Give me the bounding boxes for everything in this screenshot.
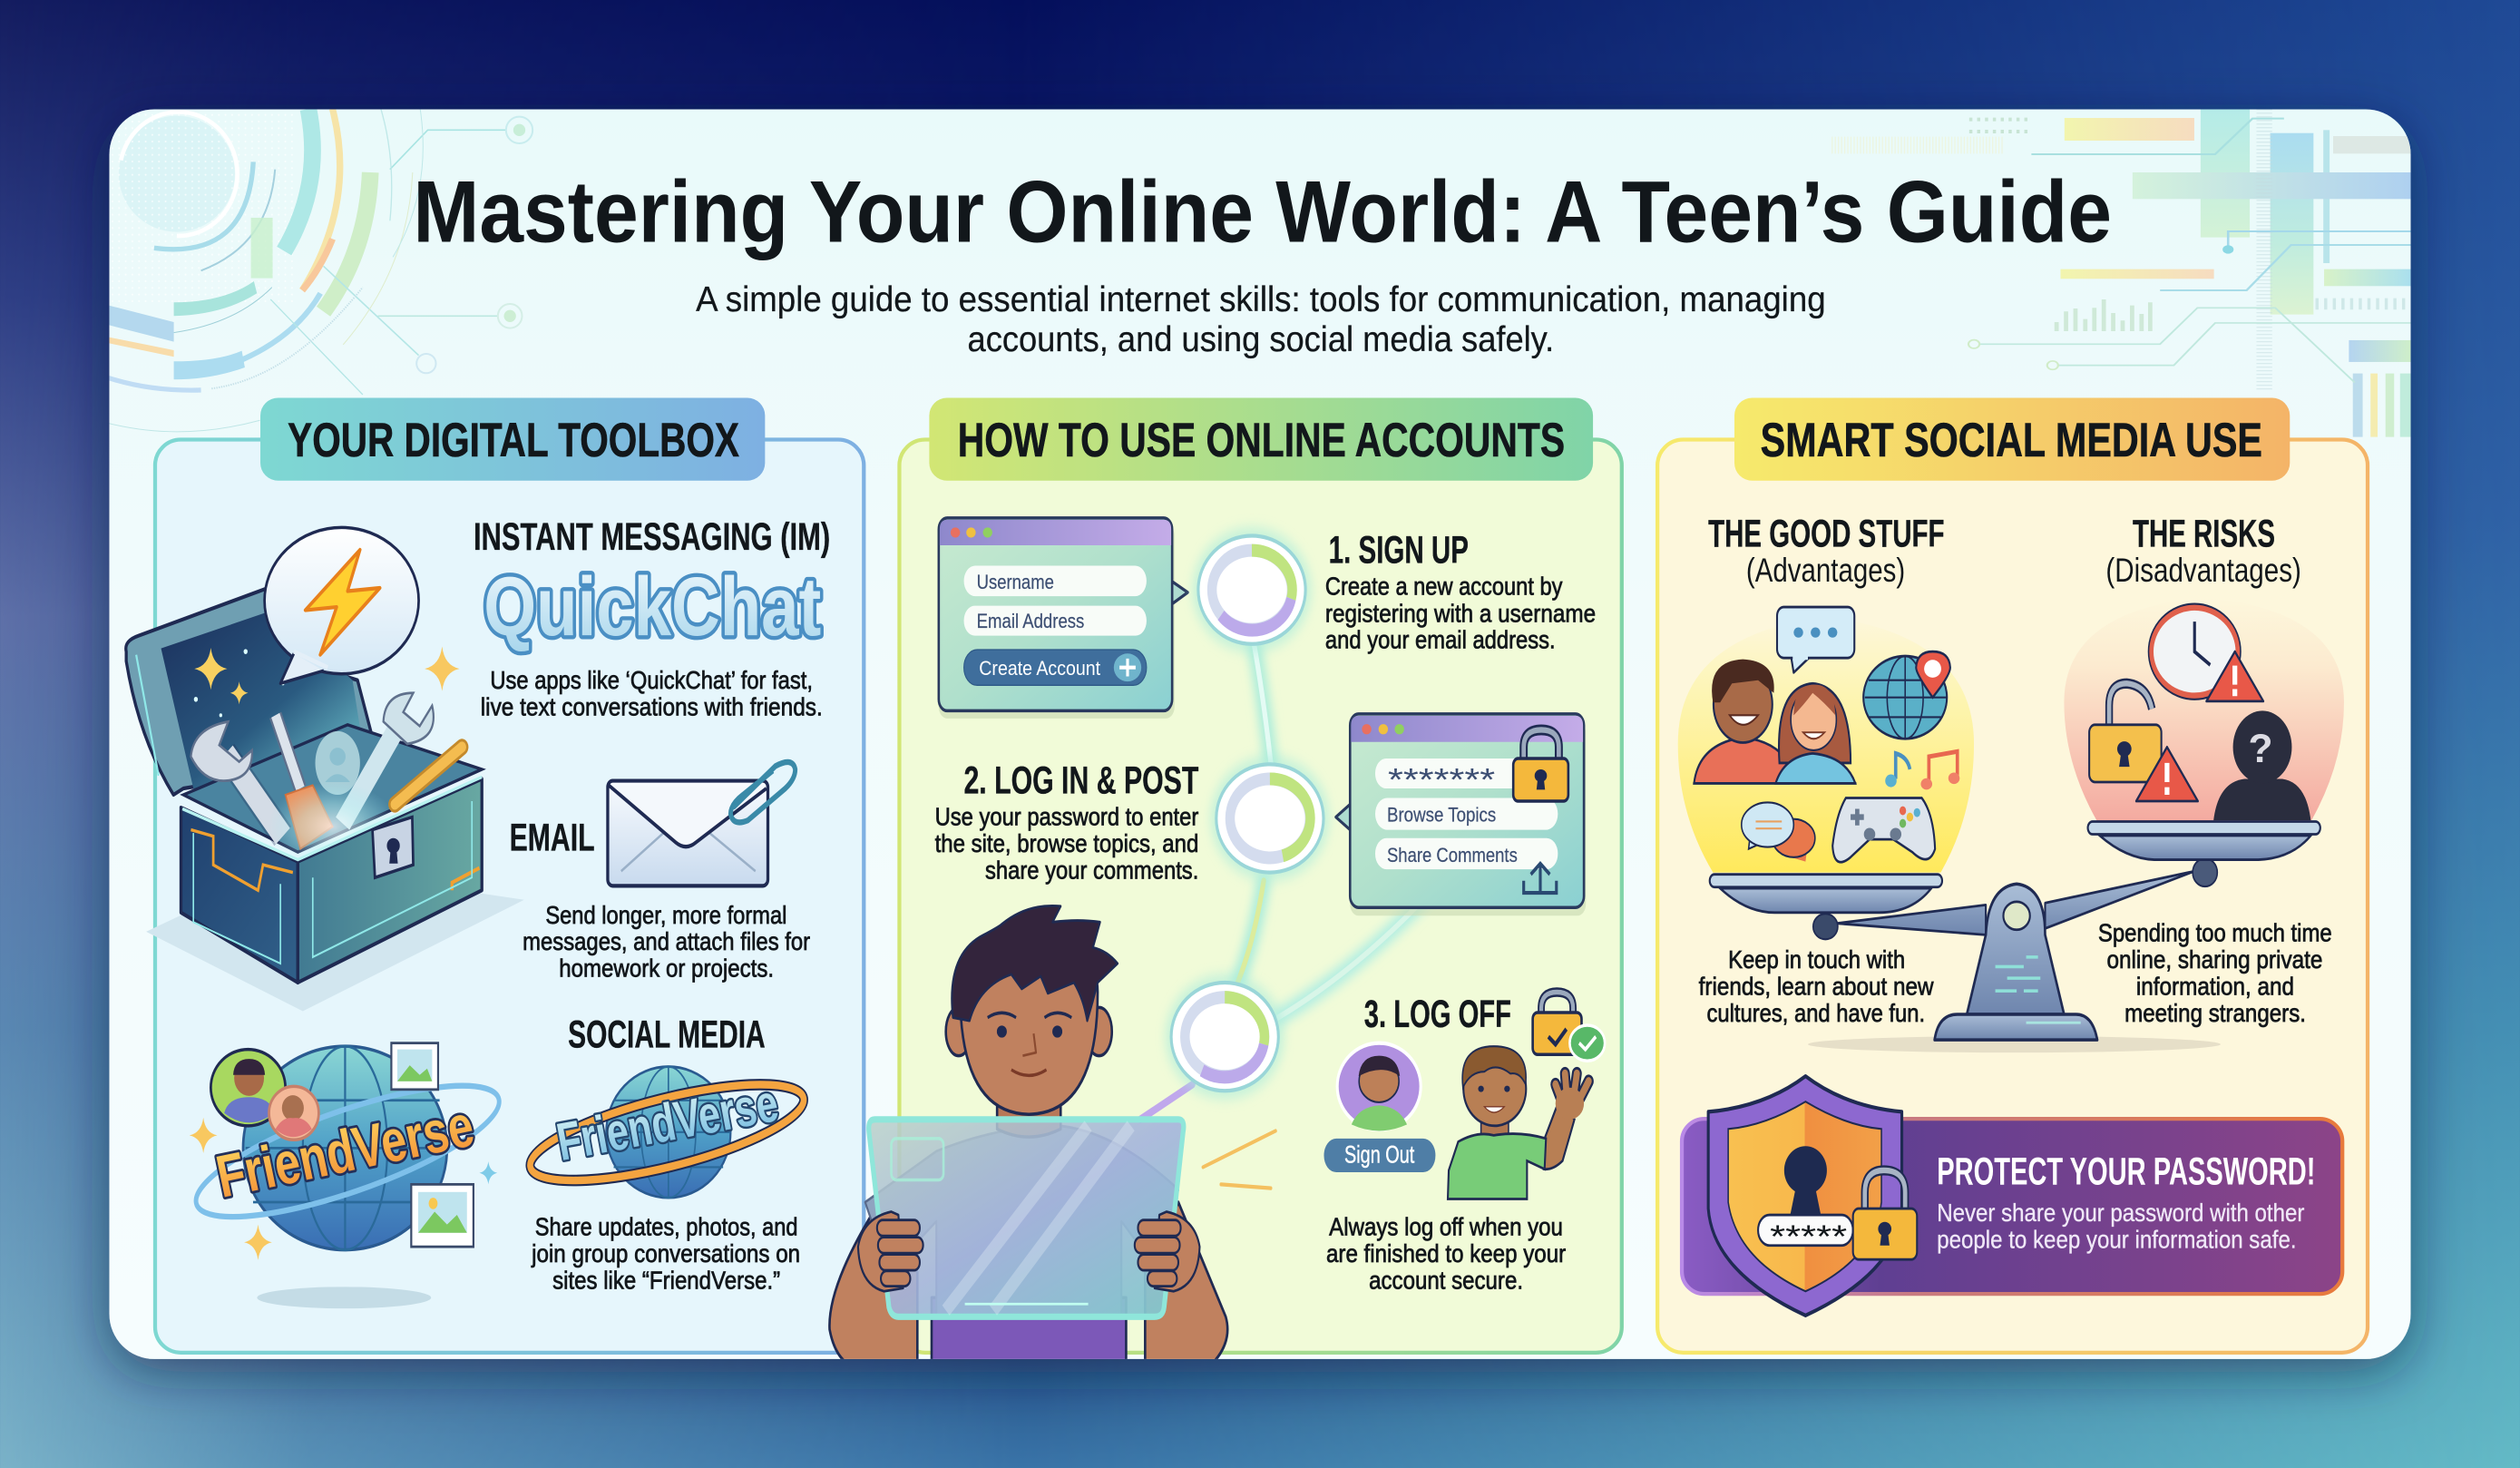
torso xyxy=(932,1297,1126,1365)
step 1 text: and your email address. xyxy=(1325,626,1556,654)
disadvantages text: online, sharing private xyxy=(2106,945,2322,974)
step 1 text xyxy=(1325,530,1596,654)
illustration: teen holding glass tablet xyxy=(829,905,1227,1365)
column heading: the good stuff xyxy=(1708,513,1945,589)
illustration: FriendVerse globe with profiles and photos xyxy=(188,1043,507,1308)
subtitle: accounts, and using social media safely. xyxy=(968,320,1554,359)
glowing connector path xyxy=(1140,645,1444,1120)
block: email: messages, and attach files for xyxy=(523,927,810,955)
column heading: the risks: THE RISKS xyxy=(2133,513,2275,555)
block: social media xyxy=(525,1014,809,1295)
advantages text xyxy=(1699,945,1934,1027)
card decoration: circuit patterns xyxy=(109,109,2415,437)
tablet xyxy=(869,1120,1184,1316)
heading tab: your digital toolbox xyxy=(260,397,765,481)
disadvantages text: information, and xyxy=(2136,972,2294,1000)
logo: FriendVerse globe with orange ring: FriendVerse xyxy=(552,1073,783,1172)
callout: protect your password: ***** xyxy=(1770,1218,1847,1255)
neck xyxy=(997,1088,1060,1137)
step 2 text: 2. LOG IN & POST xyxy=(963,760,1198,803)
main card xyxy=(109,109,2411,1359)
advantages text: Keep in touch with xyxy=(1728,945,1905,974)
motion rays near tablet xyxy=(1203,1130,1275,1189)
column heading: the risks xyxy=(2105,513,2301,589)
ears xyxy=(946,1007,1112,1056)
step 3 text xyxy=(1326,993,1566,1295)
block: instant messaging: INSTANT MESSAGING (IM) xyxy=(474,516,830,559)
step 1 text: registering with a username xyxy=(1325,599,1596,627)
block: instant messaging: Use apps like ‘QuickChat’ for fast, xyxy=(490,666,813,694)
column heading: the good stuff: THE GOOD STUFF xyxy=(1708,513,1945,555)
logo: FriendVerse globe with orange ring xyxy=(525,1065,809,1200)
step 3 text: Always log off when you xyxy=(1329,1213,1563,1241)
block: email: homework or projects. xyxy=(559,954,774,983)
block: social media: join group conversations on xyxy=(531,1239,800,1267)
step 2 text: the site, browse topics, and xyxy=(935,829,1198,857)
block: instant messaging: live text conversations with friends. xyxy=(481,692,823,720)
step 1 text: Create a new account by xyxy=(1325,573,1563,601)
illustration: advantages icons xyxy=(1678,607,1974,873)
advantages text: cultures, and have fun. xyxy=(1707,999,1925,1027)
avatar: sign out button: Sign Out xyxy=(1344,1141,1415,1169)
callout: protect your password: people to keep your information safe. xyxy=(1937,1226,2297,1254)
callout: protect your password: Never share your password with other xyxy=(1937,1199,2304,1227)
callout: protect your password: PROTECT YOUR PASSWORD! xyxy=(1937,1150,2315,1193)
node ring 2 xyxy=(1211,756,1329,881)
window: sign up form: Create Account xyxy=(979,657,1100,680)
icon: envelope with paperclip xyxy=(608,762,796,886)
t-shirt xyxy=(865,1126,1178,1316)
subtitle: A simple guide to essential internet skills: tools for communication, managing xyxy=(696,280,1826,319)
eyes and smile xyxy=(988,1013,1071,1075)
icon: lock with green check xyxy=(1533,993,1605,1061)
hair xyxy=(952,905,1118,1021)
window: log in: Share Comments xyxy=(1387,844,1518,866)
decoration: top-right circuit blocks xyxy=(1831,109,2415,437)
face xyxy=(960,941,1098,1114)
heading tab: smart social media use xyxy=(1734,397,2290,481)
illustration: open toolbox with speech bubble xyxy=(126,527,524,1012)
node ring 1 xyxy=(1193,527,1311,652)
step 1 text: 1. SIGN UP xyxy=(1329,530,1469,573)
step 3 text: account secure. xyxy=(1369,1267,1523,1295)
arms xyxy=(829,1202,1227,1365)
disadvantages text: meeting strangers. xyxy=(2124,999,2306,1027)
window: log in: ******* xyxy=(1388,762,1495,798)
heading tab: online accounts: HOW TO USE ONLINE ACCOUNTS xyxy=(958,414,1565,467)
window: sign up form xyxy=(939,518,1187,719)
panel: your digital toolbox xyxy=(126,397,864,1353)
illustration: risks icons xyxy=(2064,598,2344,821)
window: log in xyxy=(1336,714,1586,915)
panel: how to use online accounts xyxy=(899,397,1622,1353)
block: social media: SOCIAL MEDIA xyxy=(568,1014,766,1057)
block: email: Send longer, more formal xyxy=(545,901,786,929)
window: log in: Browse Topics xyxy=(1387,803,1496,826)
heading tab: your digital toolbox: YOUR DIGITAL TOOLBOX xyxy=(288,414,739,467)
advantages text: friends, learn about new xyxy=(1699,972,1934,1000)
illustration: waving boy xyxy=(1448,1046,1588,1199)
heading tab: online accounts xyxy=(929,397,1593,481)
title: Mastering Your Online World: A Teen’s Guide xyxy=(413,163,2112,261)
step 2 text xyxy=(935,760,1198,885)
decoration: top-left concentric rings xyxy=(109,109,532,432)
illustration: balance scale xyxy=(1710,821,2320,1052)
heading tab: smart social media use: SMART SOCIAL MEDIA USE xyxy=(1761,414,2262,467)
icon: shield with keyhole and lock xyxy=(1708,1076,1917,1316)
block: instant messaging xyxy=(474,516,830,720)
disadvantages text xyxy=(2098,918,2332,1027)
window: sign up form: Username xyxy=(977,571,1054,593)
column heading: the risks: (Disadvantages) xyxy=(2105,551,2301,589)
window: sign up form: Email Address xyxy=(977,610,1084,632)
avatar: sign out button xyxy=(1324,1043,1435,1172)
logo: QuickChat: QuickChat xyxy=(483,560,821,653)
logo: FriendVerse orange: FriendVerse xyxy=(210,1091,479,1210)
block: email: EMAIL xyxy=(510,817,595,860)
panel: smart social media use xyxy=(1657,397,2368,1353)
block: social media: sites like “FriendVerse.” xyxy=(552,1267,780,1295)
hands xyxy=(858,1212,1199,1291)
tablet highlights xyxy=(892,1126,1131,1310)
step 2 text: Use your password to enter xyxy=(935,803,1198,831)
step 2 text: share your comments. xyxy=(985,856,1198,885)
block: email xyxy=(510,762,810,983)
block: social media: Share updates, photos, and xyxy=(535,1213,797,1241)
node ring 3 xyxy=(1166,974,1284,1099)
step 3 text: 3. LOG OFF xyxy=(1364,993,1511,1036)
step 3 text: are finished to keep your xyxy=(1326,1239,1566,1267)
illustration: risks icons: ? xyxy=(2249,727,2273,771)
disadvantages text: Spending too much time xyxy=(2098,918,2332,946)
column heading: the good stuff: (Advantages) xyxy=(1746,551,1905,589)
subtitle xyxy=(696,280,1826,359)
callout: protect your password xyxy=(1682,1076,2342,1316)
